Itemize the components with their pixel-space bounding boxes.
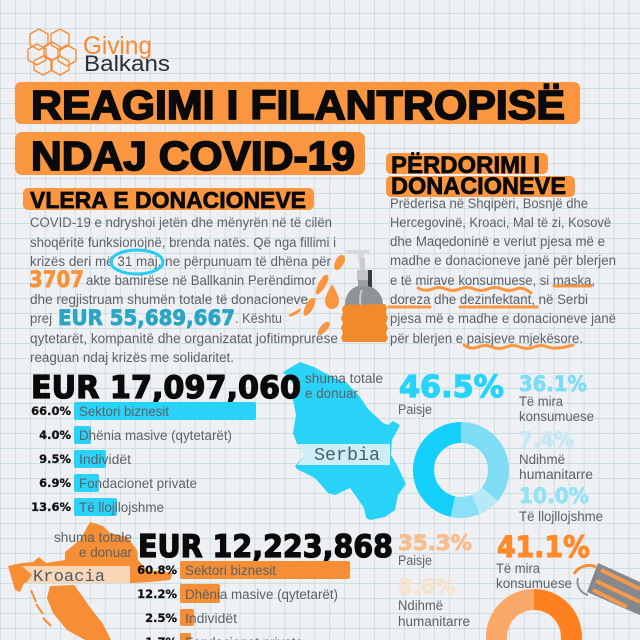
bar chart: Croatia donors: 2.5% (145, 611, 177, 625)
icon: face mask (574, 563, 640, 615)
total: EUR 12,223,868: shuma totale (54, 530, 132, 545)
stats: Serbia use of donations: humanitarre (519, 467, 593, 482)
text block: use of donations: dhe Maqedoninë e veriut pjesa më e (390, 234, 605, 249)
total: EUR 12,223,868: EUR 12,223,868 (138, 529, 393, 565)
stats: Croatia use of donations: konsumuese (496, 576, 572, 591)
stats: Croatia use of donations: 35.3% (398, 531, 472, 555)
title: Reagimi i Filantropisë ndaj COVID-19 (15, 82, 580, 179)
stats: Serbia use of donations: Ndihmë (519, 452, 565, 467)
bar chart: Serbia donors (31, 402, 256, 516)
logo: Giving Balkans: Balkans (84, 51, 170, 76)
text block: value of donations: dhe regjistruam shumën totale të donacioneve (30, 292, 308, 307)
bar chart: Serbia donors: 66.0% (31, 404, 71, 418)
stats: Serbia use of donations: konsumuese (519, 409, 594, 424)
total: EUR 17,097,060: shuma totale (305, 371, 383, 386)
stats: Croatia use of donations (398, 530, 590, 629)
label: Kroacia (22, 566, 130, 587)
highlight circle: 31 maj (111, 250, 163, 274)
stats: Croatia use of donations: Të mira (496, 561, 540, 576)
stats: Croatia use of donations: 41.1% (497, 530, 590, 564)
bar chart: Serbia donors: 13.6% (31, 500, 71, 514)
text block: value of donations: akte bamirëse në Ballkanin Perëndimor (86, 273, 316, 288)
bar chart: Serbia donors: Fondacionet private (79, 476, 197, 491)
label: Kroacia: Kroacia (33, 568, 105, 587)
text block: value of donations: COVID-19 e ndryshoi jetën dhe mënyrën në të cilën (30, 215, 332, 230)
text block: value of donations: shoqëritë funksionojnë, brenda natës. Që nga fillimi i (30, 235, 336, 250)
stats: Croatia use of donations: 8.6% (398, 575, 456, 599)
text block: use of donations: Hercegovinë, Kroaci, Mal të zi, Kosovë (390, 215, 611, 230)
text block: use of donations: për blerjen e paisjeve mjekësore. (390, 331, 583, 346)
bar chart: Croatia donors (137, 561, 350, 640)
text block: use of donations: pjesa më e madhe e donacioneve janë (390, 311, 616, 326)
logo: Giving Balkans (28, 29, 170, 76)
stats: Serbia use of donations: Të llojllojshme (519, 509, 603, 524)
stats: Serbia use of donations: Të mira (519, 394, 563, 409)
map: Croatia (8, 522, 173, 640)
icon: hexagon logo mark (28, 29, 76, 75)
heading: Përdorimi i donacioneve: PËRDORIMI I (391, 152, 540, 179)
icon: hand sanitizer bottle with drops (288, 250, 388, 342)
bar chart: Croatia donors: Dhënia masive (qytetarët) (185, 587, 338, 602)
stats: Croatia use of donations: Ndihmë (398, 598, 443, 613)
text block: value of donations: . Kështu (235, 311, 282, 326)
stats: Serbia use of donations (398, 370, 603, 524)
title: Reagimi i Filantropisë ndaj COVID-19: NDAJ COVID-19 (31, 133, 355, 179)
donut chart: Croatia (486, 589, 582, 640)
bar chart: Croatia donors: 60.8% (137, 563, 177, 577)
stats: Croatia use of donations: humanitarre (398, 614, 470, 629)
text block: use of donations: e të mirave konsumuese, si maska, (390, 273, 595, 288)
bar chart: Serbia donors: 4.0% (39, 428, 71, 442)
bar chart: Serbia donors: Të llojllojshme (79, 500, 164, 515)
text block: use of donations (389, 196, 616, 348)
logo: Giving Balkans: Giving (83, 32, 152, 60)
stats: Serbia use of donations: Paisje (398, 402, 432, 417)
stats: Serbia use of donations: 46.5% (399, 370, 504, 405)
total: EUR 12,223,868: e donuar (79, 545, 132, 560)
text block: use of donations: madhe e donacioneve janë për blerjen (390, 253, 616, 268)
bar chart: Croatia donors: Sektori biznesit (185, 563, 276, 578)
label: Serbia (297, 444, 390, 466)
text block: value of donations: 3707 (29, 268, 84, 293)
stats: Serbia use of donations: 10.0% (519, 484, 589, 508)
heading: Vlera e donacioneve: VLERA E DONACIONEVE (30, 187, 306, 213)
text block: value of donations (29, 215, 338, 365)
bar chart: Croatia donors: 12.2% (137, 587, 177, 601)
label: Serbia: Serbia (314, 446, 380, 466)
text block: value of donations: prej (30, 311, 52, 326)
heading: Përdorimi i donacioneve: DONACIONEVE (391, 173, 566, 200)
text block: value of donations: krizës deri më 31 maj, ne përpunuam të dhëna për (30, 254, 331, 269)
text block: use of donations: doreza dhe dezinfektant, në Serbi (390, 292, 588, 307)
stats: Croatia use of donations: Paisje (398, 553, 432, 568)
bar chart: Serbia donors: 6.9% (39, 476, 71, 490)
text block: value of donations: EUR 55,689,667 (58, 306, 235, 330)
text block: value of donations: qytetarët, kompanitë dhe organizatat jofitimprurëse (30, 331, 338, 346)
bar chart: Serbia donors: Dhënia masive (qytetarët) (79, 428, 232, 443)
heading: Përdorimi i donacioneve (386, 152, 575, 200)
bar chart: Serbia donors: Individët (79, 452, 131, 467)
text block: value of donations: reaguan ndaj krizës me solidaritet. (30, 350, 234, 365)
title: Reagimi i Filantropisë ndaj COVID-19: REAGIMI I FILANTROPISË (31, 82, 565, 128)
total: EUR 17,097,060: e donuar (305, 386, 358, 401)
bar chart: Serbia donors: Sektori biznesit (79, 404, 169, 419)
stats: Serbia use of donations: 36.1% (519, 372, 587, 396)
underline squiggles (389, 286, 591, 348)
bar chart: Croatia donors: Individët (185, 611, 237, 626)
stats: Serbia use of donations: 7.4% (519, 428, 574, 452)
total: EUR 17,097,060: EUR 17,097,060 (31, 370, 301, 406)
bar chart: Serbia donors: 9.5% (39, 452, 71, 466)
map: Serbia (283, 362, 406, 520)
text block: use of donations: Prëderisa në Shqipëri, Bosnjë dhe (390, 196, 588, 211)
donut chart: Serbia (424, 432, 498, 508)
